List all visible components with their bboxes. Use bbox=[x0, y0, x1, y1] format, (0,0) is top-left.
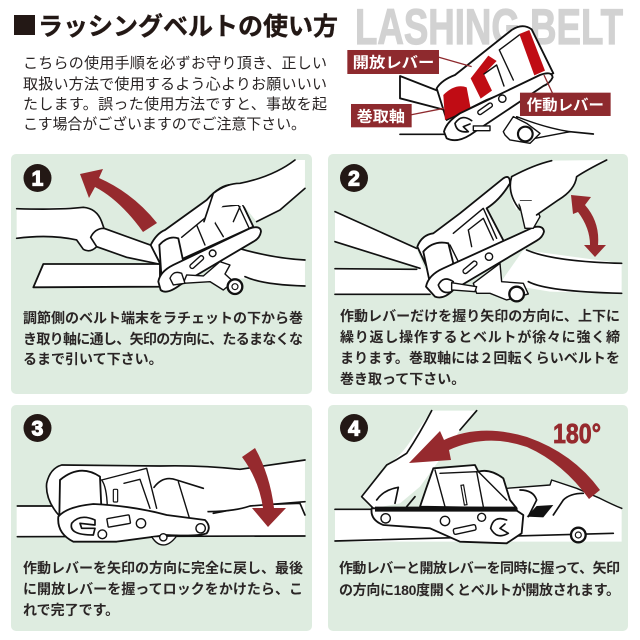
step 3 text: に開放レバーを握ってロックをかけたら、こ bbox=[23, 581, 303, 597]
intro text: こす場合がございますのでご注意下さい。 bbox=[23, 115, 306, 133]
illustration: step 1 hands and ratchet bbox=[17, 160, 305, 294]
step 3 text: 作動レバーを矢印の方向に完全に戻し、最後 bbox=[23, 560, 303, 576]
step 4 text bbox=[339, 560, 620, 598]
panel: step 1 bbox=[11, 154, 312, 394]
illustration: step 2 hand on lever bbox=[335, 160, 622, 301]
number badge 4: 4 bbox=[348, 418, 360, 440]
label: operating lever bbox=[520, 75, 611, 116]
step 2 text: 繰り返し操作するとベルトが徐々に強く締 bbox=[340, 329, 620, 345]
number badge 3 bbox=[24, 414, 52, 442]
step 1 text bbox=[23, 310, 303, 367]
step 1 text: 調節側のベルト端末をラチェットの下から巻 bbox=[23, 310, 303, 326]
step 1 text: るまで引いて下さい。 bbox=[23, 351, 163, 367]
arrow: pull up-left bbox=[80, 169, 157, 232]
arrow: 180 degree arc bbox=[409, 431, 600, 499]
step 4 text: の方向に180度開くとベルトが開放されます。 bbox=[339, 582, 620, 598]
illustration: step 4 ratchet opened 180 degrees bbox=[335, 411, 622, 543]
arrow: up and down bbox=[571, 195, 606, 257]
panel: step 3 bbox=[11, 405, 312, 631]
number badge 3: 3 bbox=[32, 418, 43, 440]
intro text: たします。誤った使用方法ですと、事故を起 bbox=[23, 96, 327, 113]
intro text bbox=[23, 55, 327, 133]
label: winding shaft bbox=[351, 104, 444, 127]
number badge 2: 2 bbox=[348, 168, 360, 190]
label: 180 degrees: 180° bbox=[553, 418, 601, 449]
label: winding shaft: 巻取軸 bbox=[357, 107, 405, 125]
title: ラッシングベルトの使い方 bbox=[38, 12, 338, 41]
intro text: こちらの使用手順を必ずお守り頂き、正しい bbox=[23, 55, 327, 72]
number badge 1 bbox=[24, 164, 52, 192]
step 2 text bbox=[340, 308, 620, 387]
intro text: 取扱い方法で使用するよう心よりお願いいい bbox=[23, 76, 327, 93]
number badge 4 bbox=[340, 414, 368, 442]
step 2 text: 巻き取って下さい。 bbox=[340, 371, 465, 387]
step 2 text: 作動レバーだけを握り矢印の方向に、上下に bbox=[340, 308, 620, 324]
step 1 text: き取り軸に通し、矢印の方向に、たるまなくな bbox=[23, 331, 303, 347]
label: release lever bbox=[347, 50, 472, 74]
number badge 1: 1 bbox=[32, 168, 44, 190]
arrow: downward bbox=[242, 448, 286, 527]
step 4 text: 作動レバーと開放レバーを同時に握って、矢印 bbox=[339, 560, 620, 576]
panel: step 4 bbox=[328, 405, 628, 631]
panel: step 2 bbox=[328, 154, 628, 394]
label: release lever: 開放レバー bbox=[353, 53, 434, 71]
illustration: step 3 closed ratchet bbox=[17, 460, 305, 545]
number badge 2 bbox=[340, 164, 368, 192]
step 3 text bbox=[23, 560, 303, 618]
label: operating lever: 作動レバー bbox=[527, 97, 604, 114]
step 2 text: まります。巻取軸には２回転くらいベルトを bbox=[340, 350, 620, 366]
step 3 text: れで完了です。 bbox=[23, 602, 119, 618]
header diagram: ratchet parts bbox=[347, 26, 611, 143]
